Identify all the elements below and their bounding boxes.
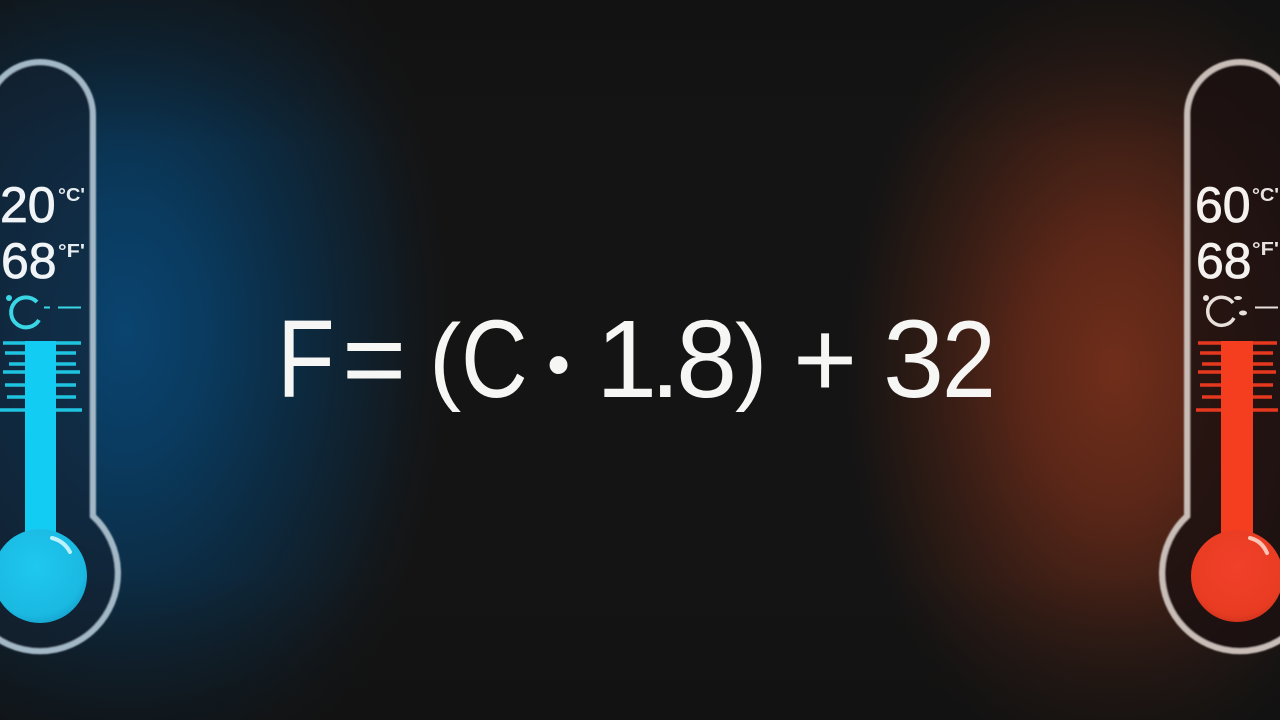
unit label: °F' (1252, 239, 1279, 259)
bulb (0, 529, 87, 623)
formula: C (461, 297, 528, 421)
formula: = (342, 298, 406, 421)
bulb (1191, 530, 1280, 622)
formula: 1.8 (596, 298, 737, 421)
formula (277, 297, 996, 421)
temperature reading: 68 °F: 68 (1196, 233, 1252, 289)
unit label: °C' (58, 185, 85, 205)
formula: F (277, 297, 335, 421)
thermometer: hot (right) (1162, 62, 1280, 651)
scale ticks (0, 343, 82, 410)
thermometer: cold (left) (0, 62, 118, 651)
formula: ( (429, 304, 461, 413)
unit label: °F' (58, 241, 85, 261)
scale ticks (1196, 343, 1278, 410)
formula: 2 (942, 297, 996, 420)
temperature reading: 20 °C: 20 (0, 177, 56, 233)
formula: + (793, 298, 857, 421)
formula: • (547, 327, 570, 401)
glass outline (1162, 62, 1280, 651)
mercury column (25, 341, 56, 556)
bulb highlight (1250, 538, 1267, 553)
temperature reading: 68 °F: 68 (1, 233, 57, 289)
Celsius symbol (6, 295, 81, 327)
formula: 3 (883, 298, 944, 421)
formula: ) (735, 304, 767, 413)
bulb highlight (52, 538, 70, 552)
temperature reading: 60 °C: 60 (1195, 177, 1251, 233)
Celsius symbol (1203, 295, 1278, 325)
mercury column (1221, 341, 1253, 556)
glass outline (0, 62, 118, 651)
unit label: °C' (1252, 185, 1279, 205)
